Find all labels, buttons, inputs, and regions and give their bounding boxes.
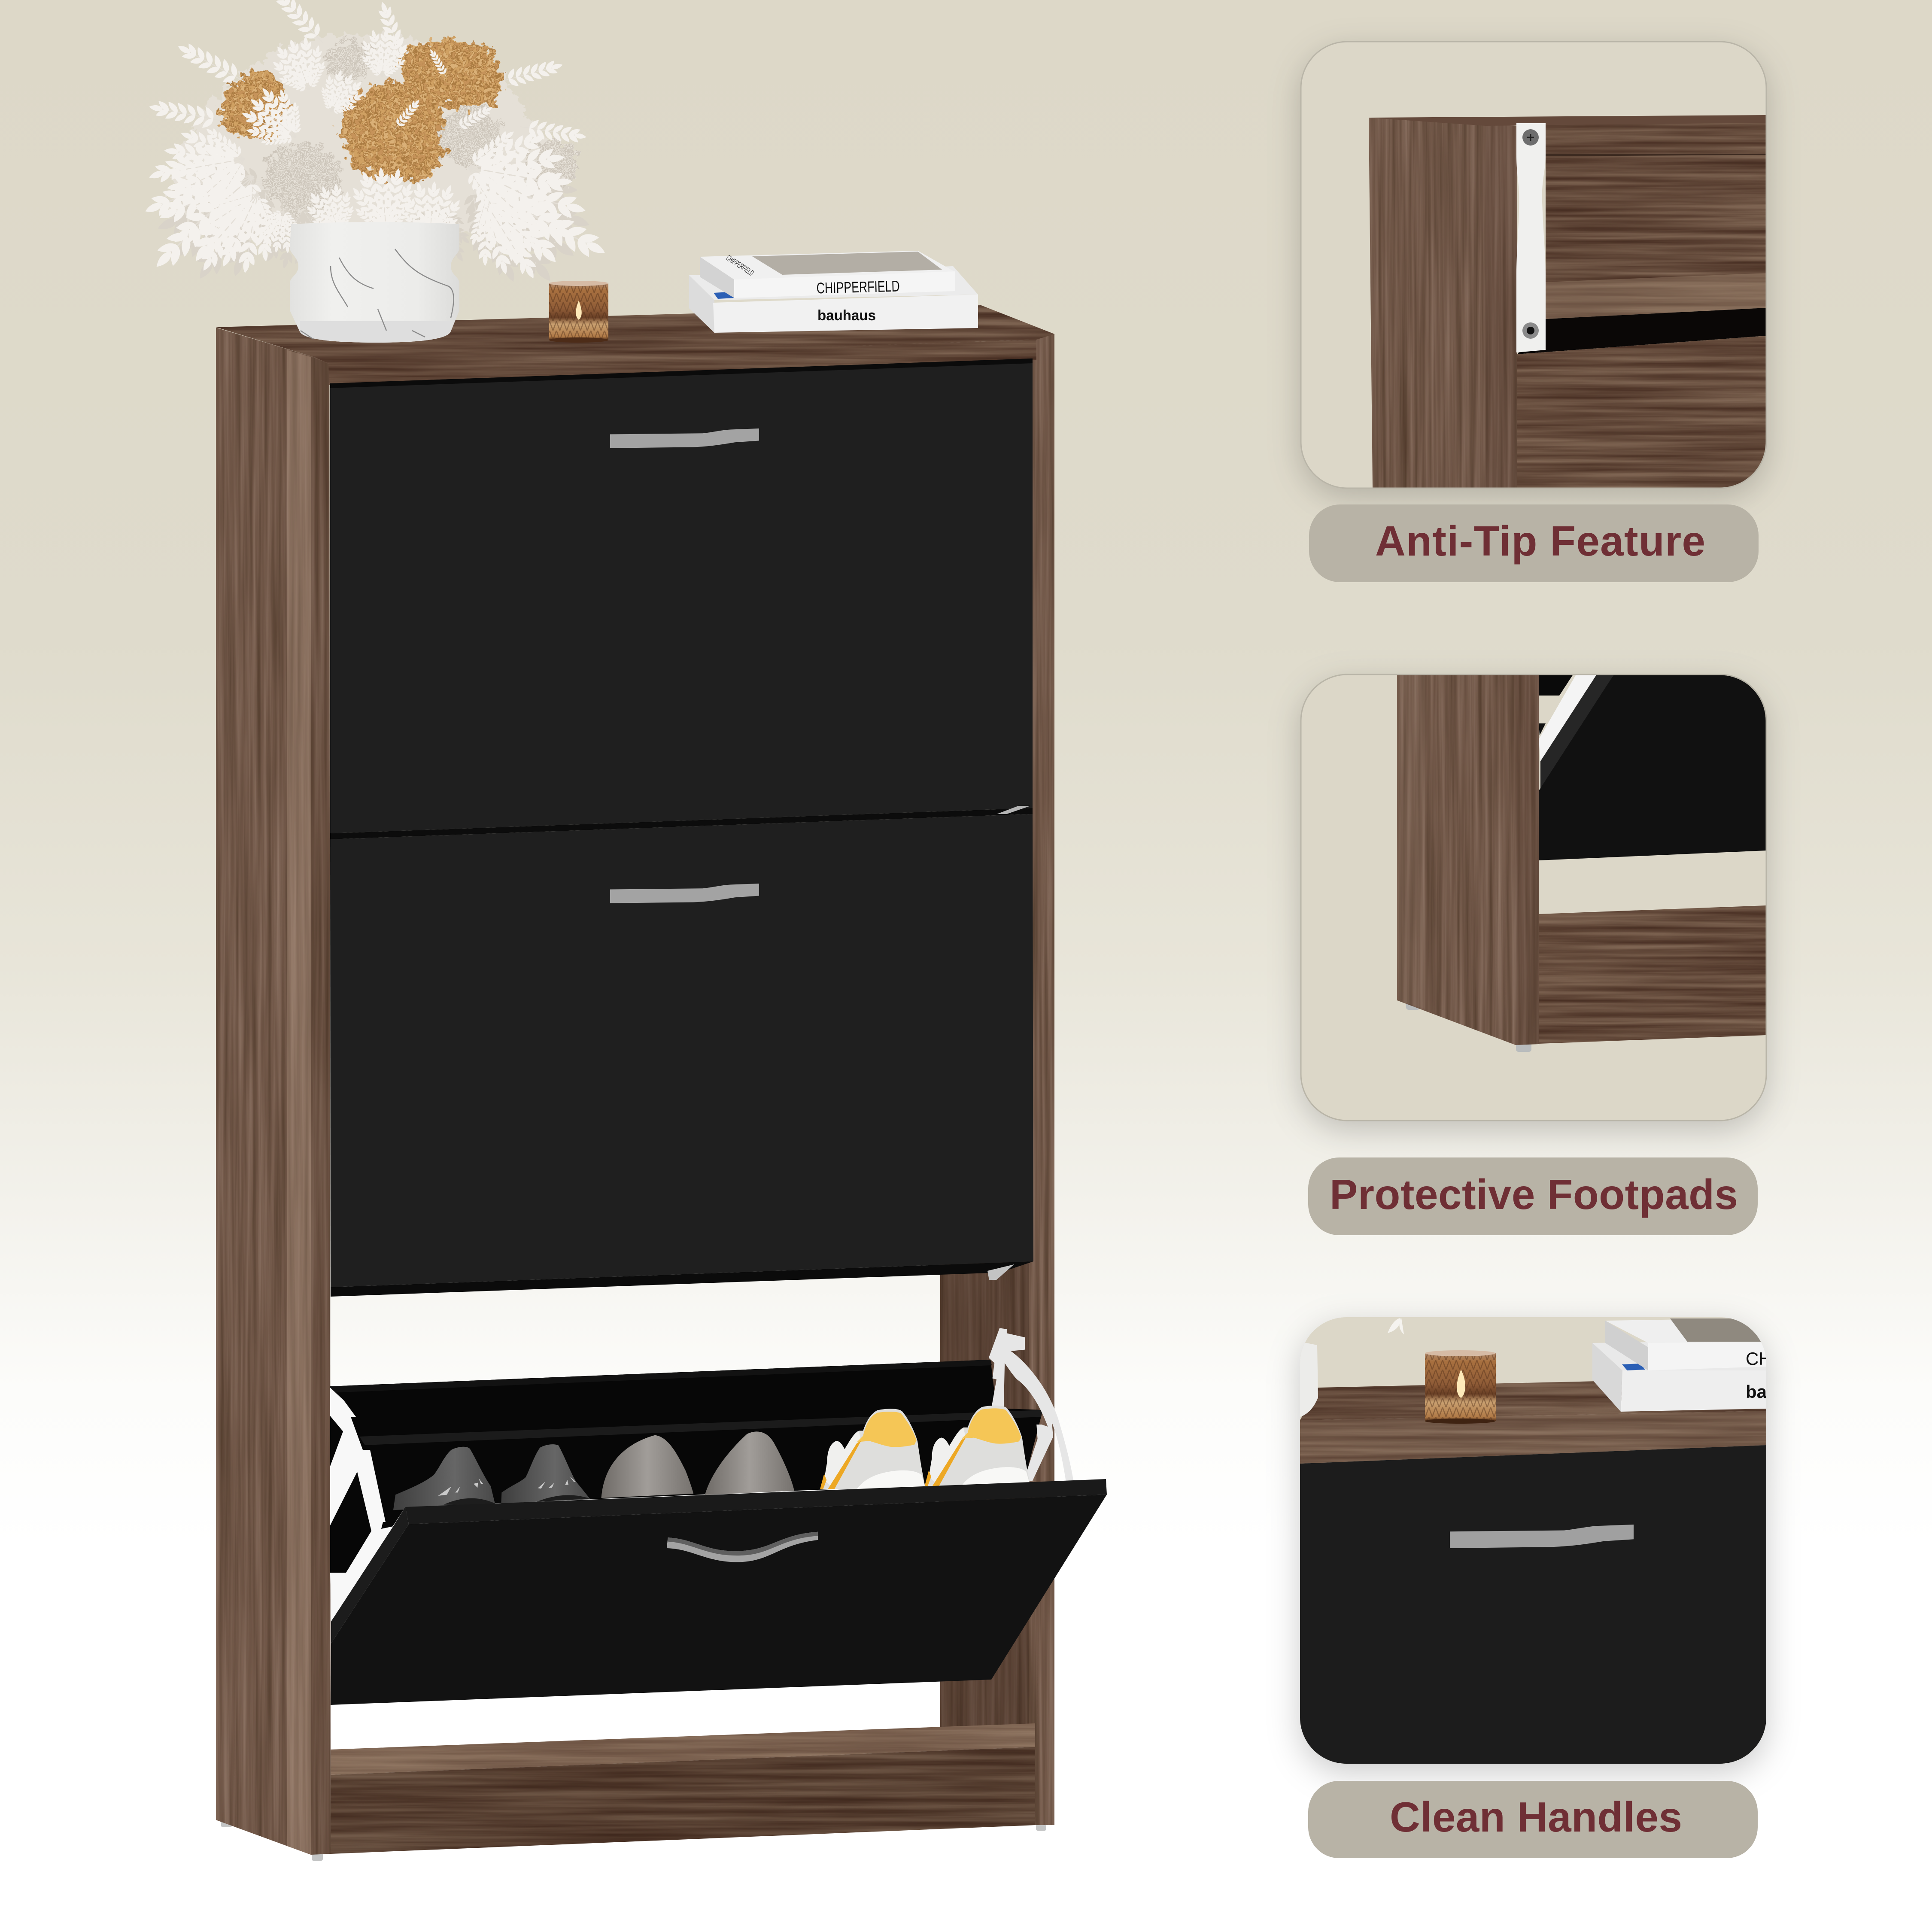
dark patent shoe 2 bbox=[501, 1444, 590, 1504]
cabinet top surface bbox=[216, 305, 1054, 364]
vase fragment bbox=[1300, 1342, 1318, 1417]
leaf tip bbox=[1388, 1318, 1404, 1334]
drawer curved handle bbox=[667, 1532, 818, 1562]
book title: bauhaus: bauhaus bbox=[817, 307, 876, 324]
drawer front bbox=[331, 1495, 1107, 1705]
cabinet top surface bbox=[1300, 1377, 1766, 1420]
orange berry clusters bbox=[221, 39, 501, 182]
white leaf sprigs bbox=[137, 0, 614, 292]
bottom book top bbox=[689, 266, 978, 300]
lower grommet bbox=[1522, 322, 1539, 339]
plinth lip tint bbox=[331, 1723, 1035, 1775]
cover image bbox=[752, 252, 942, 275]
rough edge tone bbox=[1397, 674, 1425, 1009]
label pill: protective footpads: Protective Footpads bbox=[1330, 1171, 1738, 1218]
label pill: anti-tip feature bbox=[1309, 504, 1759, 582]
door handle bbox=[1450, 1525, 1634, 1548]
book text CH: CHIPPERFIELD bbox=[1746, 1349, 1877, 1369]
drawer tray interior bbox=[330, 1360, 1043, 1622]
middle door bbox=[330, 814, 1033, 1287]
wall dark tint bbox=[940, 1258, 1037, 1728]
panel: protective footpads bbox=[1301, 674, 1766, 1121]
black door bbox=[1300, 1445, 1766, 1764]
black sliver bbox=[1539, 723, 1546, 735]
front edge tone bbox=[1485, 125, 1517, 488]
decor: book stack bbox=[689, 251, 978, 333]
label pill: clean handles bbox=[1308, 1781, 1758, 1858]
upper door shadow gap bbox=[330, 808, 1033, 839]
rail light tint bbox=[1300, 1411, 1766, 1464]
plinth top lip bbox=[331, 1723, 1035, 1775]
plinth wood bbox=[1539, 905, 1766, 1044]
lighter shelf edge bbox=[1546, 273, 1766, 319]
middle door handle bbox=[610, 884, 759, 903]
label pill: clean handles: Clean Handles bbox=[1390, 1793, 1682, 1841]
top front rail bbox=[328, 340, 1036, 385]
shoes: dark patent and grey bbox=[393, 1435, 693, 1510]
side panel wood bbox=[1369, 118, 1517, 488]
top book bbox=[1605, 1318, 1766, 1370]
bottom book front bbox=[713, 295, 978, 333]
top book cover bbox=[700, 251, 954, 279]
upper door handle bbox=[610, 428, 759, 448]
panel border bbox=[1301, 674, 1766, 1121]
sneaker 2 bbox=[925, 1406, 1030, 1486]
book title: Chipperfield: CHIPPERFIELD bbox=[816, 277, 900, 297]
pampas fluff bbox=[264, 41, 577, 215]
footpad detail photo bbox=[1397, 674, 1766, 1052]
grey shoe 4 bbox=[705, 1431, 794, 1495]
white anti-tip strap bbox=[1516, 123, 1546, 352]
bouquet shaded mass bbox=[170, 35, 576, 243]
panel background and shadow bbox=[1300, 1317, 1766, 1764]
top door shadow bbox=[330, 358, 1033, 388]
spine text on cover: CHIPPERFIELD bbox=[724, 254, 755, 278]
left white bracket bbox=[330, 1388, 393, 1622]
hinge under middle door bbox=[987, 1264, 1014, 1280]
left side panel bbox=[216, 328, 331, 1855]
label pill: protective footpads bbox=[1308, 1157, 1758, 1235]
footpads bbox=[1406, 998, 1531, 1052]
sneaker 1 bbox=[820, 1409, 926, 1489]
tray ledge bbox=[359, 1410, 1043, 1445]
panel: anti-tip feature bbox=[1301, 42, 1766, 488]
candle bbox=[1425, 1350, 1496, 1424]
back panel wood bbox=[1546, 155, 1766, 319]
upper door bbox=[330, 358, 1033, 833]
black drawer front bbox=[1539, 674, 1766, 860]
front edge tone bbox=[1516, 674, 1539, 1045]
book text ba: bauhaus bbox=[1746, 1382, 1820, 1402]
right side edge bbox=[1029, 334, 1054, 1825]
small hinge bbox=[997, 806, 1030, 814]
tray top rim bbox=[330, 1360, 992, 1393]
bottom book pages bbox=[689, 275, 714, 333]
anti-tip detail photo bbox=[1369, 115, 1766, 488]
black panel top bbox=[1539, 674, 1573, 696]
footpads bbox=[221, 1819, 1046, 1861]
panel border bbox=[1301, 42, 1766, 488]
label pill: anti-tip feature: Anti-Tip Feature bbox=[1375, 517, 1705, 565]
cabinet top sliver bbox=[1369, 115, 1766, 126]
dark bevel bbox=[1540, 674, 1614, 791]
dark patent shoe 1 bbox=[393, 1447, 495, 1510]
handle detail photo bbox=[1300, 1318, 1877, 1764]
main shoe cabinet bbox=[216, 305, 1107, 1861]
side panel wood bbox=[1397, 674, 1539, 1045]
right white bracket bbox=[989, 1328, 1073, 1481]
shaded back leaves bbox=[131, 122, 615, 314]
panel background and shadow bbox=[1301, 42, 1766, 488]
top book pages bbox=[700, 257, 734, 298]
decor: amber candle bbox=[549, 281, 608, 343]
drawer left bevel bbox=[331, 1507, 409, 1643]
white sneakers with yellow heels bbox=[820, 1406, 1030, 1489]
panel background and shadow bbox=[1301, 674, 1766, 1121]
front rail bbox=[1300, 1411, 1766, 1464]
top book front bbox=[734, 271, 955, 298]
panel: clean handles bbox=[1300, 1317, 1877, 1764]
inner right wall bbox=[940, 1258, 1037, 1728]
rail lower line bbox=[1546, 154, 1766, 156]
upper screw bbox=[1522, 129, 1539, 146]
top rail bbox=[1546, 123, 1765, 154]
bottom book bbox=[1592, 1340, 1766, 1412]
plinth bbox=[331, 1747, 1035, 1854]
blue book tab bbox=[714, 292, 735, 299]
drawer top edge bbox=[405, 1479, 1107, 1524]
middle door underside bbox=[331, 1261, 1033, 1297]
black gap bbox=[1517, 308, 1766, 354]
white bracket bbox=[1539, 674, 1597, 761]
decor: dried flower bouquet bbox=[131, 0, 615, 314]
lower wood bbox=[1517, 336, 1766, 488]
decor: marble vase bbox=[290, 222, 459, 343]
grey shoe 3 bbox=[601, 1435, 693, 1498]
plinth dark tint bbox=[331, 1747, 1035, 1854]
